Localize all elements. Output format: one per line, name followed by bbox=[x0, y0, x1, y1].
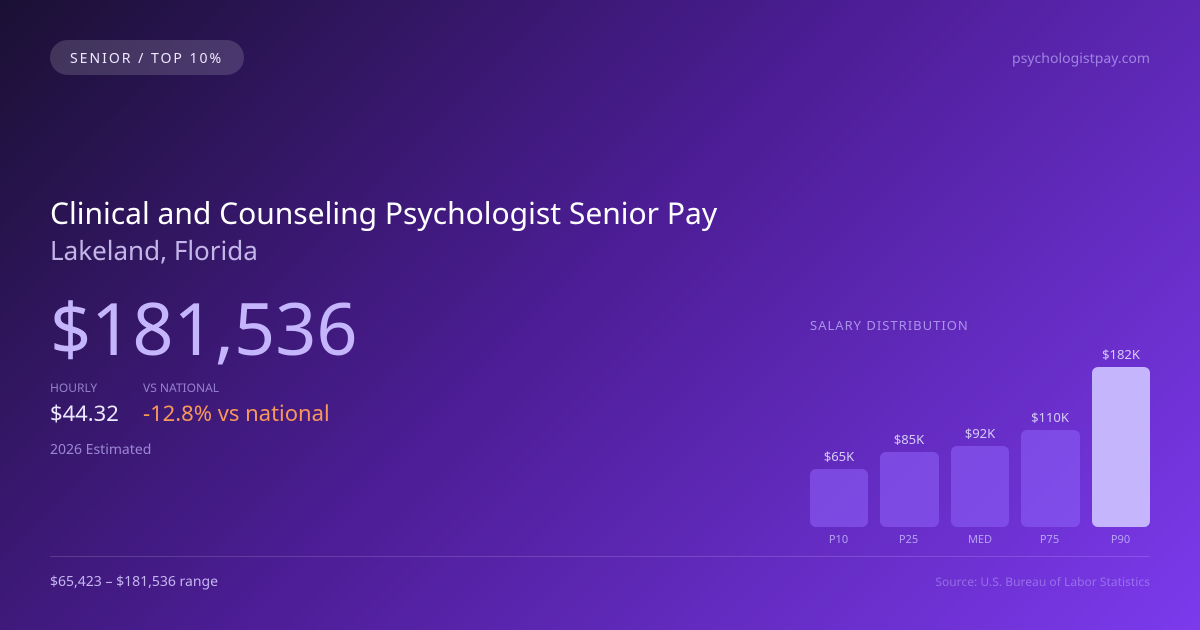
bar chart: salary distribution bbox=[810, 316, 1150, 547]
site name: psychologistpay.com bbox=[1012, 49, 1150, 68]
stat: vs national: VS NATIONAL bbox=[143, 379, 219, 396]
percentile labels: P25 bbox=[899, 532, 918, 547]
badge: senior / top 10%: SENIOR / TOP 10% bbox=[70, 49, 223, 68]
title: Clinical and Counseling Psychologist Senior Pay bbox=[50, 192, 717, 233]
range text: $65,423 – $181,536 range bbox=[50, 572, 218, 591]
bar: median bbox=[951, 446, 1009, 527]
value labels: $110K bbox=[1031, 408, 1069, 426]
subtitle: location: Lakeland, Florida bbox=[50, 232, 258, 268]
percentile labels bbox=[829, 532, 1130, 547]
stat: vs national bbox=[143, 379, 330, 428]
value labels: $92K bbox=[965, 424, 995, 442]
stat: hourly: $44.32 bbox=[50, 398, 119, 428]
bar: P25 bbox=[880, 452, 939, 527]
percentile labels: P90 bbox=[1111, 532, 1130, 547]
percentile labels: P10 bbox=[829, 532, 848, 547]
value labels: $65K bbox=[824, 447, 854, 465]
source text: Source: U.S. Bureau of Labor Statistics bbox=[935, 573, 1150, 590]
stat: hourly: HOURLY bbox=[50, 379, 97, 396]
value labels: $182K bbox=[1102, 345, 1140, 363]
bar: P10 bbox=[810, 469, 868, 527]
value labels: $85K bbox=[894, 430, 924, 448]
bar: P75 bbox=[1021, 430, 1080, 527]
stat: hourly bbox=[50, 379, 119, 428]
year note: 2026 Estimated bbox=[50, 440, 151, 459]
percentile labels: P75 bbox=[1040, 532, 1059, 547]
headline salary: $181,536 bbox=[50, 279, 358, 377]
bar: P90 bbox=[1092, 367, 1150, 527]
chart heading: SALARY DISTRIBUTION bbox=[810, 316, 969, 334]
stat: vs national: -12.8% vs national bbox=[143, 398, 330, 428]
value labels bbox=[824, 345, 1140, 465]
badge: senior / top 10% bbox=[50, 40, 244, 75]
percentile labels: MED bbox=[968, 532, 992, 547]
